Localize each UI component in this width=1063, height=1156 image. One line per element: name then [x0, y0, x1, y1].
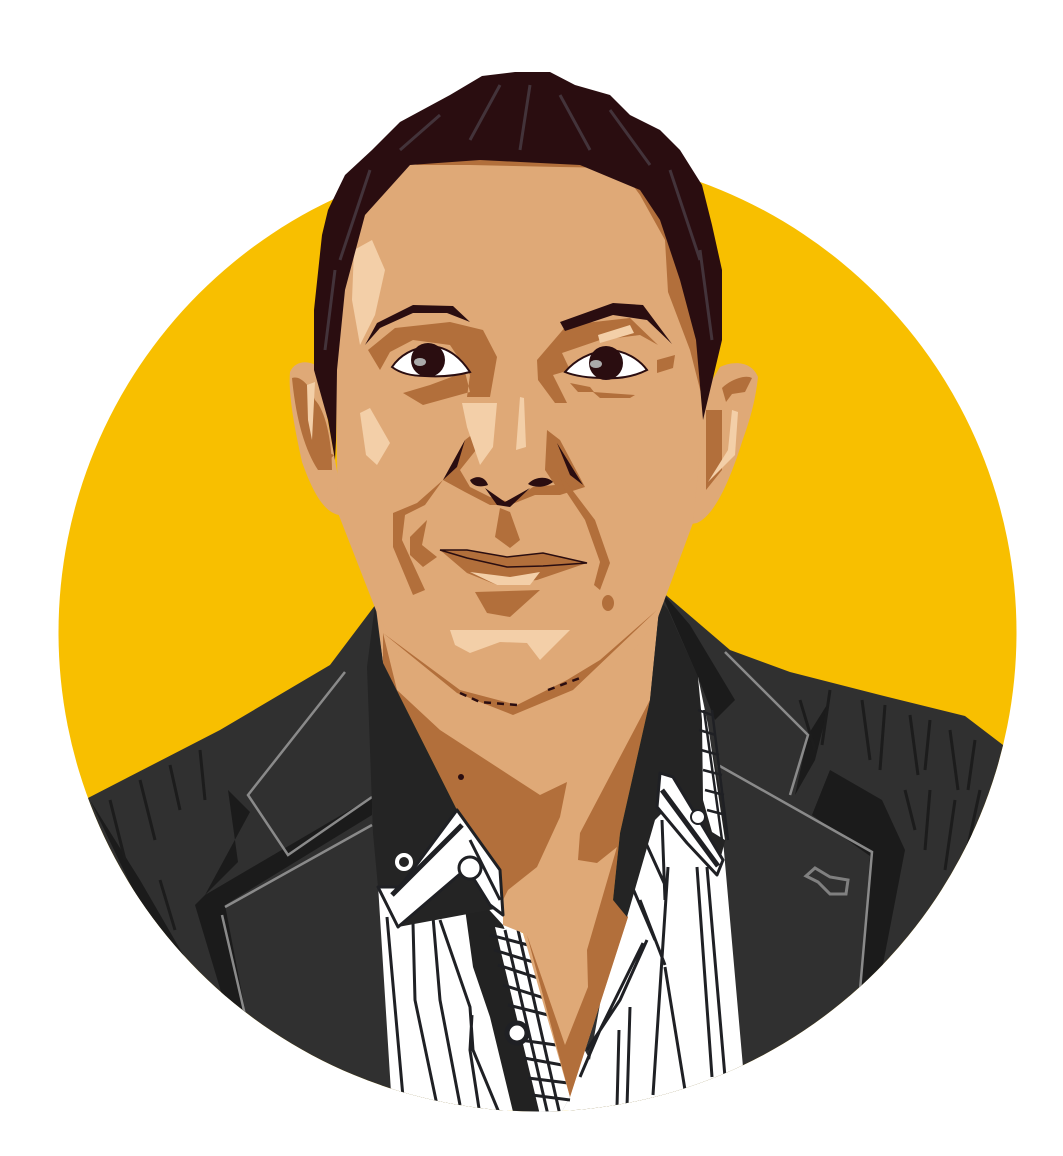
striped shirt: [378, 677, 743, 1112]
face: [335, 150, 705, 712]
placket checks: [490, 927, 570, 1115]
shirt stripes: [387, 820, 725, 1115]
smile lines: [393, 470, 610, 595]
jacket and shirt: [88, 595, 1003, 1112]
shirt button: [507, 1023, 527, 1043]
nose base shadow: [443, 430, 585, 505]
left ear: [290, 362, 345, 515]
jaw line shadow: [383, 610, 657, 715]
jacket hatching: [110, 690, 980, 930]
black shirt left collar: [367, 605, 500, 927]
left eye: [392, 343, 470, 377]
black shirt right collar: [613, 600, 728, 917]
eye shadows: [368, 318, 675, 405]
nose highlights: [462, 397, 526, 465]
chin mole: [602, 595, 614, 611]
left ear shadow: [292, 377, 334, 470]
right ear shadow: [706, 377, 752, 490]
cheek highlight: [360, 408, 390, 465]
brow highlight: [598, 325, 634, 343]
chin shadow: [475, 590, 540, 617]
hair texture: [325, 85, 712, 350]
hair: [314, 72, 722, 460]
chest shadows: [383, 633, 650, 1097]
placket: [466, 910, 570, 1112]
yellow circle background: [58, 154, 1016, 1112]
left collar strip: [378, 810, 503, 927]
right eyebrow: [560, 303, 672, 344]
mouth: [440, 550, 587, 585]
stubble line: [460, 678, 580, 705]
jacket lapel stitching: [222, 652, 872, 1015]
neck mole: [458, 774, 464, 780]
chin highlight: [450, 630, 570, 660]
chest skin: [375, 600, 660, 1097]
right ear: [685, 363, 758, 525]
left eyebrow: [365, 305, 470, 345]
ear highlight: [307, 382, 738, 482]
jacket body: [88, 595, 1003, 1111]
side face shadow: [620, 168, 704, 405]
right eye: [565, 346, 647, 380]
forehead shadow: [415, 155, 620, 168]
forehead highlight: [352, 240, 385, 345]
jacket buttonhole: [806, 868, 848, 894]
right check strip: [698, 677, 728, 840]
nose dark marks: [443, 440, 583, 507]
jacket dark creases: [90, 590, 905, 1020]
right collar strip: [657, 773, 723, 875]
